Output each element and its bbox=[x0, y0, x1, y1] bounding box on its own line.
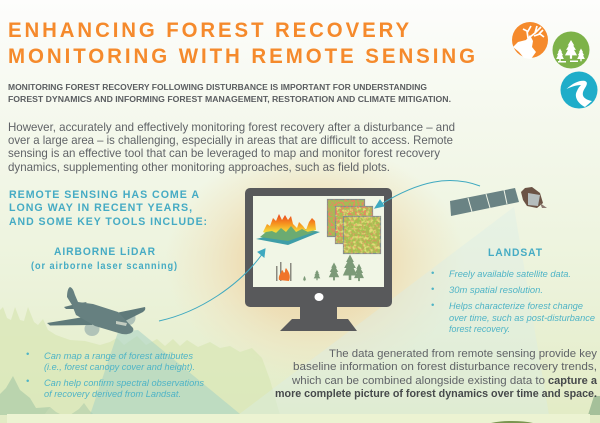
section heading: AND SOME KEY TOOLS INCLUDE: bbox=[9, 216, 208, 228]
intro paragraph: over a large area – is challenging, especially in areas that are difficult to access. Remote bbox=[8, 134, 453, 147]
landsat bullets: • bbox=[431, 267, 434, 278]
title: ENHANCING FOREST RECOVERY bbox=[8, 19, 412, 42]
intro paragraph bbox=[8, 121, 455, 174]
tree at lower right bbox=[588, 396, 600, 415]
section heading: LONG WAY IN RECENT YEARS, bbox=[9, 202, 193, 214]
airborne lidar heading: AIRBORNE LiDAR bbox=[54, 246, 156, 258]
footer panel bbox=[7, 414, 590, 423]
landsat bullets: • bbox=[431, 299, 434, 310]
light beam: airborne lidar bbox=[90, 330, 240, 415]
title: MONITORING WITH REMOTE SENSING bbox=[8, 45, 478, 68]
monitor bbox=[245, 188, 392, 331]
intro paragraph: However, accurately and effectively monitoring forest recovery after a disturbance – and bbox=[8, 121, 455, 134]
3D forest fire map bbox=[256, 214, 320, 245]
conclusion text: The data generated from remote sensing provide key bbox=[329, 348, 597, 360]
forest silhouette background bbox=[0, 307, 280, 415]
logo: blue river bbox=[560, 72, 598, 108]
lidar bullets: of recovery derived from Landsat. bbox=[44, 388, 181, 399]
arrow: lidar to monitor bbox=[159, 249, 265, 321]
forest recovery sequence bbox=[276, 254, 364, 281]
landsat bullets: forest recovery. bbox=[449, 323, 510, 334]
conclusion text: capture a bbox=[548, 375, 598, 387]
icon: landsat satellite bbox=[450, 187, 547, 216]
landsat bullets: over time, such as post-disturbance bbox=[449, 312, 595, 323]
lidar bullets: Can map a range of forest attributes bbox=[44, 350, 193, 361]
landsat bullets: 30m spatial resolution. bbox=[449, 284, 543, 295]
satellite map stack bbox=[328, 200, 380, 254]
intro paragraph: dynamics, supplementing other monitoring approaches, such as field plots. bbox=[8, 161, 390, 174]
landsat bullets: Helps characterize forest change bbox=[449, 300, 583, 311]
intro paragraph: sensing is an effective tool that can be leveraged to map and monitor forest recovery bbox=[8, 147, 440, 160]
landsat bullets bbox=[431, 267, 595, 334]
lidar bullets: • bbox=[26, 375, 29, 386]
airborne lidar heading bbox=[31, 246, 178, 272]
section heading: REMOTE SENSING HAS COME A bbox=[9, 189, 200, 201]
landsat bullets: Freely available satellite data. bbox=[449, 268, 571, 279]
conclusion text: baseline information on forest disturbance recovery trends, bbox=[293, 361, 597, 373]
landsat bullets: • bbox=[431, 283, 434, 294]
lidar bullets bbox=[26, 348, 204, 399]
conclusion text: which can be combined alongside existing data to bbox=[291, 375, 545, 387]
conclusion text bbox=[275, 348, 598, 400]
icon: airplane bbox=[47, 287, 145, 336]
lidar bullets: • bbox=[26, 348, 29, 359]
subtitle: MONITORING FOREST RECOVERY FOLLOWING DISTURBANCE IS IMPORTANT FOR UNDERSTANDING bbox=[8, 82, 427, 92]
logo: orange caribou bbox=[512, 22, 548, 59]
section heading bbox=[9, 189, 208, 228]
arrow: landsat to monitor bbox=[375, 181, 480, 208]
subtitle bbox=[8, 82, 451, 104]
airborne lidar heading: (or airborne laser scanning) bbox=[31, 261, 178, 272]
lidar bullets: (i.e., forest canopy cover and height). bbox=[44, 361, 195, 372]
subtitle: FOREST DYNAMICS AND INFORMING FOREST MANAGEMENT, RESTORATION AND CLIMATE MITIGATION. bbox=[8, 94, 451, 104]
title bbox=[8, 19, 478, 68]
lidar bullets: Can help confirm spectral observations bbox=[44, 377, 204, 388]
light beam: landsat bbox=[238, 207, 549, 415]
logo: green trees bbox=[552, 32, 590, 68]
landsat heading: LANDSAT bbox=[488, 247, 543, 259]
